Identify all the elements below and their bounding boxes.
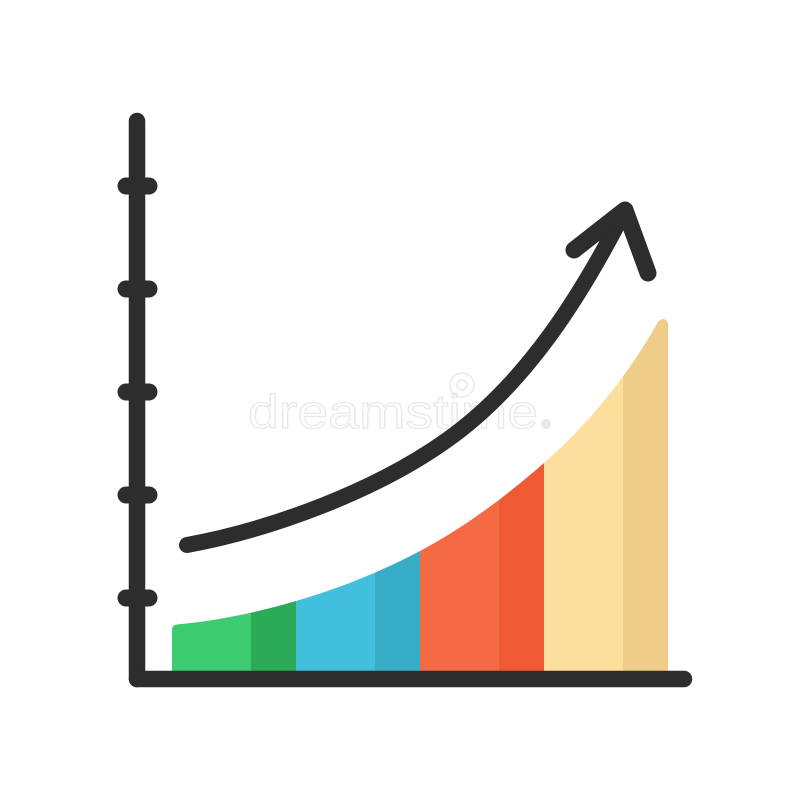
arrow head [574, 210, 648, 273]
arrow: rising growth trend [187, 210, 648, 545]
band: dark orange [499, 463, 544, 671]
arrow shaft [187, 210, 625, 545]
band: dark yellow [623, 300, 668, 671]
x axis [137, 671, 684, 687]
tick 2 [126, 280, 149, 298]
tick 4 [126, 486, 149, 504]
band: yellow [544, 376, 623, 671]
band: orange [420, 500, 499, 671]
band: blue [296, 572, 375, 671]
band: green [172, 612, 251, 671]
area chart: coloured growth bands [172, 300, 668, 671]
tick 1 [126, 178, 149, 194]
tick 5 [126, 590, 149, 606]
band: dark green [251, 601, 296, 671]
axis line: vertical [129, 121, 145, 679]
infographic: growth chart icon [118, 112, 692, 688]
watermark: dreamstime: dreamstime [248, 385, 538, 438]
y axis with ticks [126, 121, 149, 679]
tick 3 [126, 384, 149, 400]
watermark: dreamstime [248, 373, 551, 438]
band: dark blue [375, 551, 420, 671]
